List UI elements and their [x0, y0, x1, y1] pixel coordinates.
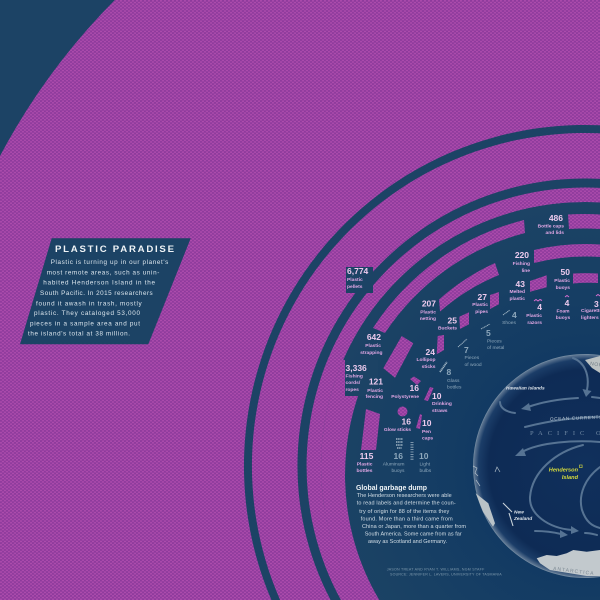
label: plastic pipes: pipes — [475, 309, 488, 315]
label: plastic pellets: Plastic — [347, 277, 363, 283]
icon: light bulbs — [410, 442, 414, 460]
label: pieces of wood: of wood — [464, 362, 482, 368]
label: plastic netting: 207 — [422, 298, 436, 308]
current: north loop — [573, 358, 588, 390]
label: shoes: Shoes — [502, 320, 516, 326]
label: aluminum buoys — [383, 451, 405, 474]
icon: razors — [534, 300, 542, 301]
label: foam buoys — [556, 298, 570, 321]
blob: drinking straws — [424, 387, 434, 401]
body text: to read labels and determine the coun- — [357, 501, 456, 507]
long band — [373, 220, 525, 333]
label: glass bottles: 8 — [446, 367, 452, 377]
intro text: pieces in a sample area and put — [30, 320, 140, 327]
body text: The Henderson researchers were able — [357, 493, 452, 499]
label: cigarette lighters — [581, 299, 600, 321]
label: plastic pellets — [347, 266, 369, 290]
label: fishing line: Fishing — [513, 261, 530, 267]
label: plastic strapping: strapping — [360, 350, 383, 356]
bar: bottle caps — [568, 214, 600, 229]
label: plastic buoys — [554, 267, 570, 291]
label: glass bottles: bottles — [447, 384, 462, 390]
icon: pieces of metal — [481, 324, 490, 329]
label: shoes — [502, 310, 517, 326]
label: plastic netting — [420, 298, 436, 322]
label: plastic fencing: 121 — [369, 376, 383, 386]
label: glow sticks: 16 — [402, 416, 411, 426]
bar: plastic bottles — [361, 409, 380, 450]
icon: shoes — [503, 310, 510, 315]
label: melted plastic — [510, 279, 525, 302]
label: fishing cords — [346, 363, 367, 393]
panel background — [20, 238, 191, 344]
current: north Pacific — [528, 398, 578, 407]
label: glass bottles — [446, 367, 462, 390]
label: lollipop sticks — [416, 347, 436, 370]
bar: plastic pipes — [490, 292, 499, 309]
item labels — [346, 213, 600, 474]
land: Australia — [476, 493, 495, 527]
label: plastic razors — [526, 302, 542, 326]
label: glow sticks — [384, 416, 411, 433]
label: pen caps: 10 — [422, 418, 432, 428]
label: pieces of wood — [464, 345, 482, 368]
credits — [387, 568, 502, 577]
plastic item bars — [361, 214, 600, 450]
intro text: most remote areas, such as unin- — [47, 269, 159, 276]
land: New Zealand — [503, 503, 513, 526]
map label: Hawaiian Islands: Hawaiian Islands — [506, 386, 545, 392]
icon: foam buoys — [565, 296, 569, 297]
current: south equatorial — [522, 441, 600, 452]
body text: South America. Some came from as far — [365, 532, 462, 538]
map label: New Zealand: Zealand — [513, 516, 533, 522]
band: pellets — [307, 188, 600, 600]
current: equatorial — [525, 417, 600, 427]
label: plastic strapping — [360, 332, 383, 356]
label: plastic buoys: buoys — [556, 285, 570, 291]
label: fishing cords: cords/ — [346, 380, 361, 386]
label: aluminum buoys: 16 — [394, 451, 403, 461]
label: cigarette lighters: 3 — [594, 299, 599, 309]
bar: plastic buoys — [573, 273, 598, 284]
globe — [473, 354, 600, 578]
intro text: found it awash in trash, mostly — [36, 300, 143, 307]
label: lollipop sticks: 24 — [426, 347, 435, 357]
icon: pieces of wood — [458, 339, 467, 347]
label: plastic bottles — [356, 451, 374, 474]
current: circumpolar east — [585, 533, 597, 535]
label: drinking straws — [432, 391, 452, 414]
map label: Antarctica: ANTARCTICA — [553, 566, 595, 577]
label block: pellets — [346, 267, 373, 293]
label: plastic fencing: fencing — [366, 394, 383, 400]
label: plastic netting: netting — [420, 316, 436, 322]
label: drinking straws: straws — [432, 408, 448, 414]
label: plastic buoys: 50 — [561, 267, 570, 277]
body text — [357, 493, 466, 545]
blob: pen caps — [416, 414, 422, 429]
label: buckets: 25 — [448, 316, 457, 326]
label: pen caps — [422, 418, 433, 442]
label: bottle caps: 486 — [549, 213, 563, 223]
map label: New Zealand — [513, 510, 533, 522]
label: lollipop sticks: sticks — [422, 364, 436, 370]
label: plastic pipes — [472, 292, 488, 315]
label: fishing line — [513, 250, 530, 274]
ocean currents — [500, 358, 600, 538]
label: pen caps: caps — [422, 436, 433, 442]
label: bottle caps: and lids — [546, 230, 564, 236]
label: glow sticks: Glow sticks — [384, 427, 411, 433]
label: plastic bottles: Plastic — [357, 462, 373, 468]
label: aluminum buoys: buoys — [391, 468, 405, 474]
body text: away as Scotland and Germany. — [368, 539, 447, 545]
bar: buckets — [459, 312, 469, 329]
current: west hook — [500, 402, 515, 413]
current: gyre loop — [530, 445, 583, 530]
inner dark disc — [321, 202, 600, 600]
intro text: the island's total at 38 million. — [28, 330, 130, 337]
label: fishing line: 220 — [515, 250, 529, 260]
label: polystyrene: Polystyrene — [391, 394, 419, 400]
intro text — [28, 259, 168, 337]
label: plastic pellets: 6,774 — [347, 266, 369, 276]
blob: polystyrene — [410, 376, 421, 385]
label: buckets — [438, 316, 457, 332]
bar: plastic netting — [439, 263, 499, 312]
label: light bulbs — [419, 451, 432, 474]
label: fishing line: line — [522, 268, 530, 274]
land: Antarctica — [537, 550, 600, 576]
title: PLASTIC PARADISE — [55, 244, 175, 255]
label: light bulbs: 10 — [419, 451, 429, 461]
label: fishing cords: 3,336 — [346, 363, 367, 373]
intro text: South Pacific. In 2015 researchers — [40, 290, 153, 297]
label: plastic bottles: 115 — [360, 451, 374, 461]
label: melted plastic: 43 — [516, 279, 525, 289]
label: plastic fencing — [366, 376, 383, 400]
label: shoes: 4 — [512, 310, 517, 320]
bar: fishing line — [534, 244, 600, 263]
label: pieces of metal: of metal — [487, 345, 504, 351]
bar: lollipop sticks — [437, 335, 444, 354]
label: foam buoys: 4 — [565, 298, 570, 308]
panel: plastic paradise — [20, 238, 191, 344]
label: plastic razors: Plastic — [526, 313, 542, 319]
label: plastic razors: razors — [527, 320, 542, 326]
label: plastic fencing: Plastic — [367, 388, 383, 394]
label: pieces of wood: Pieces — [464, 355, 480, 361]
label: pieces of metal: 5 — [486, 328, 491, 338]
second dark ring — [297, 179, 600, 600]
icon: glass bottles — [440, 362, 447, 372]
body text: try of origin for 88 of the items they — [359, 509, 450, 515]
label: polystyrene — [391, 383, 419, 400]
label: pieces of wood: 7 — [464, 345, 469, 355]
outer dark ring — [244, 125, 600, 600]
label: plastic razors: 4 — [537, 302, 542, 312]
label: plastic netting: Plastic — [420, 310, 436, 316]
label: plastic strapping: Plastic — [365, 343, 381, 349]
blob: glow sticks — [398, 406, 408, 416]
text block: global garbage dump — [356, 483, 466, 545]
label: plastic pipes: 27 — [478, 292, 487, 302]
label: plastic buoys: Plastic — [554, 278, 570, 284]
label: plastic bottles: bottles — [356, 468, 373, 474]
label: melted plastic: plastic — [510, 296, 525, 302]
marker: Henderson Island — [580, 465, 582, 468]
label: aluminum buoys: Aluminum — [383, 462, 404, 468]
map label: Henderson Island: Henderson — [549, 468, 579, 474]
map label: New Zealand: New — [514, 510, 524, 516]
label: plastic strapping: 642 — [367, 332, 381, 342]
label: buckets: Buckets — [438, 326, 457, 332]
band: fishing cords — [321, 360, 379, 600]
label: foam buoys: Foam — [556, 308, 570, 314]
label: light bulbs: Light — [420, 462, 431, 468]
label: pieces of metal: Pieces — [487, 338, 502, 344]
heading: Global garbage dump — [356, 483, 427, 492]
intro text: plastic. They cataloged 53,000 — [34, 310, 140, 317]
label: plastic pipes: Plastic — [472, 302, 488, 308]
map label: Henderson Island — [549, 468, 579, 481]
label: polystyrene: 16 — [410, 383, 419, 393]
icon: aluminum buoys — [396, 439, 403, 448]
label: pieces of metal — [486, 328, 504, 351]
icon: cigarette lighters — [596, 294, 600, 296]
label: drinking straws: Drinking — [432, 401, 452, 407]
credits: JASON TREAT AND RYAN T. WILLIAMS, NGM STAFF — [387, 568, 485, 572]
bar: plastic strapping — [383, 336, 413, 378]
label block: cords — [345, 360, 378, 396]
body text: found. More than a third came from — [361, 516, 453, 522]
current: circumpolar west — [535, 531, 561, 534]
label: light bulbs: bulbs — [420, 468, 432, 474]
map label: Henderson Island: Island — [562, 475, 579, 481]
current: inner gyre — [581, 467, 600, 528]
label: bottle caps: Bottle caps — [538, 224, 564, 230]
intro text: habited Henderson Island in the — [43, 279, 155, 286]
land: Pacific islands — [473, 466, 500, 486]
sphere — [473, 354, 600, 578]
label: lollipop sticks: Lollipop — [416, 357, 436, 363]
label: cigarette lighters: lighters — [581, 315, 599, 321]
label: plastic pellets: pellets — [347, 284, 363, 290]
credits: SOURCE: JENNIFER L. LAVERS, UNIVERSITY OF TASMANIA — [390, 573, 502, 577]
label: foam buoys: buoys — [556, 315, 570, 321]
label: fishing cords: Fishing — [346, 374, 363, 380]
intro text: Plastic is turning up in our planet's — [51, 259, 168, 266]
label: melted plastic: Melted — [510, 289, 525, 295]
label: fishing cords: ropes — [346, 387, 359, 393]
bar: melted plastic — [530, 275, 547, 292]
label: drinking straws: 10 — [432, 391, 442, 401]
land: North America — [585, 356, 600, 373]
label: pen caps: Pen — [422, 429, 431, 435]
label: bottle caps — [538, 213, 564, 236]
small items — [396, 294, 600, 460]
current: east stub — [592, 397, 600, 398]
label: glass bottles: Glass — [447, 378, 460, 384]
body text: China or Japan, more than a quarter from — [362, 524, 466, 530]
